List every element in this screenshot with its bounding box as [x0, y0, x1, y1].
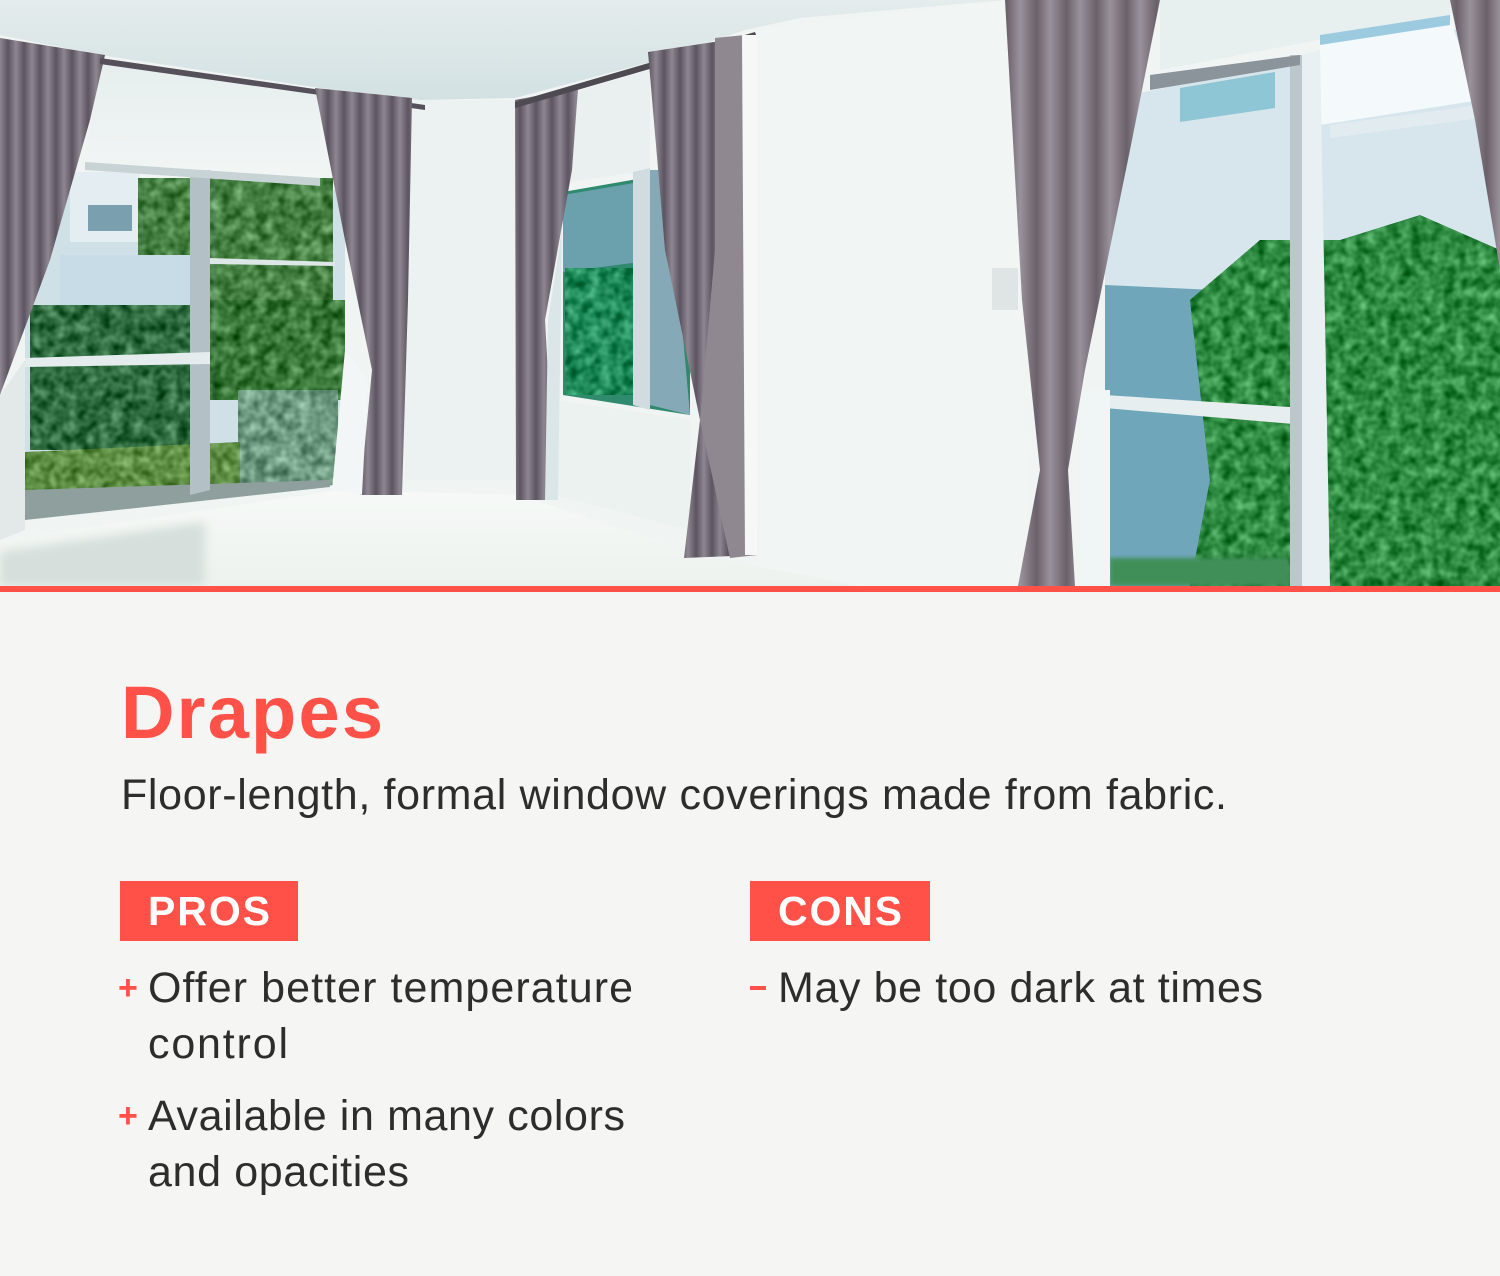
light switch — [992, 268, 1018, 310]
curtain: far right — [1450, 0, 1500, 270]
text panel background — [0, 592, 1500, 1276]
panel: cons — [750, 881, 1263, 1012]
window: middle — [563, 168, 690, 415]
pros badge — [120, 881, 298, 941]
floor — [0, 490, 860, 586]
cons badge — [750, 881, 930, 941]
curtain rod: left — [100, 58, 425, 110]
cons badge: CONS — [778, 888, 902, 934]
curtain: third — [515, 88, 578, 500]
pro item: colors: Available in many colors — [148, 1092, 625, 1140]
pros badge: PROS — [148, 888, 270, 934]
photo: room with drapes — [0, 0, 1500, 586]
pro item: colors — [118, 1092, 625, 1196]
curtain: fourth — [648, 38, 757, 558]
pro item: colors: + — [118, 1097, 138, 1135]
panel: pros — [118, 881, 633, 1196]
description: Floor-length, formal window coverings made from fabric. — [121, 771, 1227, 819]
heading: Drapes — [121, 671, 383, 754]
pro item: temperature: + — [118, 969, 138, 1007]
con item: dark: May be too dark at times — [778, 964, 1263, 1012]
pro item: temperature: Offer better temperature — [148, 964, 633, 1012]
pro item: colors: and opacities — [148, 1148, 409, 1196]
pro item: temperature — [118, 964, 633, 1068]
walls — [85, 0, 1450, 586]
curtain: far left — [0, 38, 105, 395]
curtain rod: middle — [515, 32, 757, 108]
window: right — [1080, 15, 1500, 586]
red divider line — [0, 586, 1500, 592]
curtain: fifth — [1005, 0, 1160, 586]
window: left — [25, 162, 345, 520]
pro item: temperature: control — [148, 1020, 288, 1068]
ceiling — [0, 0, 1005, 100]
curtain: second — [315, 88, 412, 495]
